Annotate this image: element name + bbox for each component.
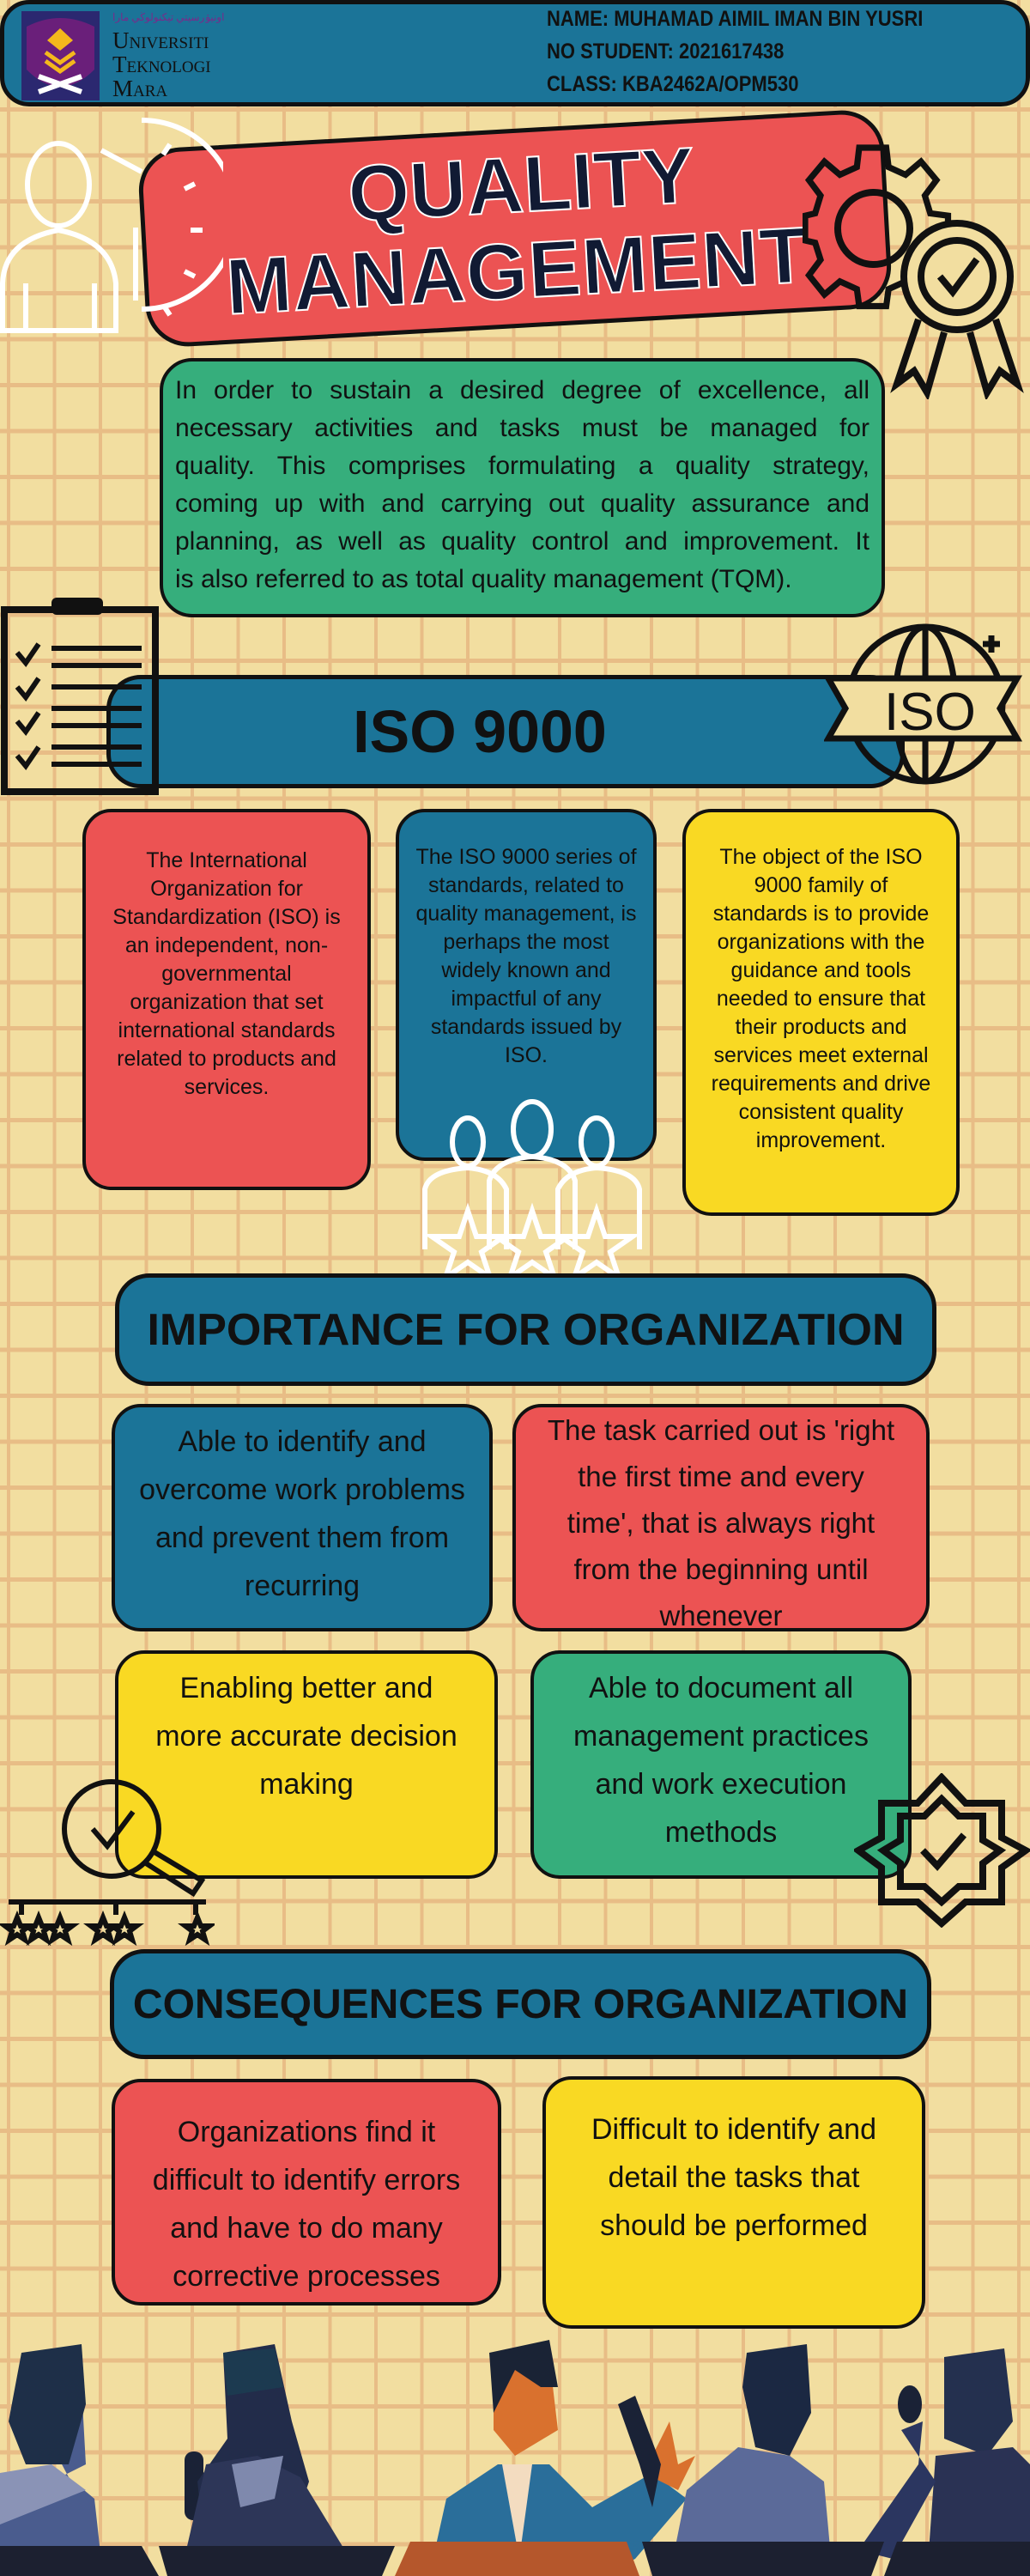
box: errors (112, 2079, 501, 2306)
logo: UiTM (21, 11, 224, 101)
box: errors: corrective processes (173, 2260, 440, 2293)
box: ISO 9000 series (396, 809, 657, 1161)
student info: NO STUDENT: 2021617438 (547, 39, 784, 64)
left woman (0, 2344, 203, 2576)
box: object of ISO 9000: requirements and drive (712, 1072, 930, 1096)
header bar (0, 0, 1030, 106)
box: identify problems: overcome work problems (139, 1473, 465, 1506)
box: object of ISO 9000 (682, 809, 960, 1216)
box: ISO 9000 series: perhaps the most (443, 930, 609, 954)
box: ISO 9000 series: standards issued by (431, 1015, 621, 1039)
box: right first time: The task carried out is 'right (548, 1414, 894, 1446)
box: right first time: the first time and every (578, 1461, 864, 1492)
logo: UiTM: Mara (112, 76, 167, 101)
logo: UiTM: Teknologi (112, 52, 211, 77)
box: right first time: time', that is always right (567, 1507, 875, 1539)
box: ISO definition: organization that set (130, 990, 324, 1014)
intro text box: coming up with and carrying out quality assurance and (175, 489, 869, 518)
right man 2 (858, 2348, 1030, 2576)
right man 1 (618, 2344, 833, 2576)
title banner: QUALITY (346, 131, 697, 239)
box: object of ISO 9000: organizations with the (718, 930, 924, 954)
box: errors: and have to do many (170, 2212, 443, 2245)
box: decision making (115, 1650, 498, 1879)
box: right first time: whenever (659, 1600, 783, 1631)
logo: UiTM: Universiti (112, 27, 209, 53)
box: decision making: making (259, 1768, 354, 1801)
box: object of ISO 9000: needed to ensure that (717, 987, 925, 1011)
box: identify problems: and prevent them from (155, 1522, 449, 1554)
student info: NAME: MUHAMAD AIMIL IMAN BIN YUSRI (547, 7, 923, 31)
box: right first time (512, 1404, 930, 1631)
box: document practices: management practices (573, 1720, 869, 1753)
box: ISO 9000 series: standards, related to (428, 873, 624, 897)
box: document practices: Able to document all (589, 1672, 853, 1704)
icon: star badge check (854, 1773, 1030, 1928)
icon: people with stars (422, 1099, 642, 1273)
heading bar: importance (115, 1273, 936, 1386)
box: document practices (530, 1650, 912, 1879)
icon: person with clock (0, 118, 223, 333)
box: ISO 9000 series: The ISO 9000 series of (415, 845, 637, 869)
box: object of ISO 9000: standards is to provide (713, 902, 929, 926)
box: identify tasks: Difficult to identify and (591, 2113, 876, 2146)
box: object of ISO 9000: services meet external (713, 1043, 929, 1067)
box: identify tasks (542, 2076, 925, 2329)
box: ISO definition: Organization for (150, 877, 303, 901)
box: object of ISO 9000: The object of the ISO (719, 845, 923, 869)
box: ISO 9000 series: ISO. (505, 1043, 548, 1067)
icon: magnifier with stars (0, 1779, 215, 1946)
heading bar: consequences (110, 1949, 931, 2059)
box: errors: difficult to identify errors (153, 2164, 460, 2196)
ISO 9000 heading bar: ISO 9000 (353, 698, 607, 765)
intro text box: In order to sustain a desired degree of excellence, all (175, 376, 869, 404)
box: object of ISO 9000: improvement. (756, 1128, 886, 1152)
logo: UiTM: اونيۏرسيتي تيكنولوڬي مارا (112, 11, 224, 23)
box: identify problems: Able to identify and (178, 1425, 427, 1458)
box: identify problems: recurring (245, 1570, 360, 1602)
student info: CLASS: KBA2462A/OPM530 (547, 72, 798, 96)
box: decision making: Enabling better and (180, 1672, 433, 1704)
box: ISO definition: governmental (161, 962, 292, 986)
box: ISO definition: related to products and (117, 1047, 336, 1071)
icon: clipboard checklist (1, 598, 159, 795)
box: ISO definition: an independent, non- (125, 933, 328, 957)
box: identify problems (112, 1404, 493, 1631)
box: ISO 9000 series: quality management, is (415, 902, 637, 926)
box: object of ISO 9000: consistent quality (739, 1100, 903, 1124)
box: ISO definition (82, 809, 371, 1190)
intro text box: quality. This comprises formulating a quality strategy, (175, 452, 869, 480)
box: object of ISO 9000: their products and (735, 1015, 907, 1039)
title banner: MANAGEMENT (224, 211, 811, 331)
ISO 9000 heading bar (106, 675, 905, 788)
title banner (136, 108, 894, 349)
intro text box: necessary activities and tasks must be managed for (175, 414, 869, 442)
box: object of ISO 9000: guidance and tools (731, 958, 911, 982)
intro text box: is also referred to as total quality management (TQM). (175, 565, 792, 593)
box: ISO definition: international standards (118, 1018, 335, 1042)
intro text box: planning, as well as quality control and improvement. It (175, 527, 869, 556)
icon: gear and award ribbon (803, 144, 1024, 399)
box: identify tasks: should be performed (600, 2209, 868, 2242)
box: ISO 9000 series: widely known and (441, 958, 611, 982)
center man (429, 2340, 695, 2576)
heading bar: consequences: CONSEQUENCES FOR ORGANIZATION (133, 1982, 908, 2026)
icon: ISO globe (824, 623, 1022, 785)
box: ISO definition: services. (185, 1075, 269, 1099)
student info (547, 7, 923, 96)
second woman (180, 2344, 360, 2576)
box: ISO 9000 series: impactful of any (451, 987, 602, 1011)
box: document practices: methods (665, 1816, 777, 1849)
box: identify tasks: detail the tasks that (609, 2161, 859, 2194)
box: errors: Organizations find it (178, 2116, 435, 2148)
box: ISO definition: Standardization (ISO) is (112, 905, 341, 929)
desks (0, 2546, 159, 2576)
box: right first time: from the beginning until (573, 1553, 869, 1585)
box: ISO definition: The International (146, 848, 307, 872)
intro text box (160, 358, 885, 617)
illustration: press conference people (0, 2340, 1030, 2576)
icon: ISO globe: ISO (884, 683, 976, 742)
heading bar: importance: IMPORTANCE FOR ORGANIZATION (147, 1305, 905, 1355)
box: object of ISO 9000: 9000 family of (754, 873, 888, 897)
box: document practices: and work execution (596, 1768, 846, 1801)
box: decision making: more accurate decision (155, 1720, 457, 1753)
